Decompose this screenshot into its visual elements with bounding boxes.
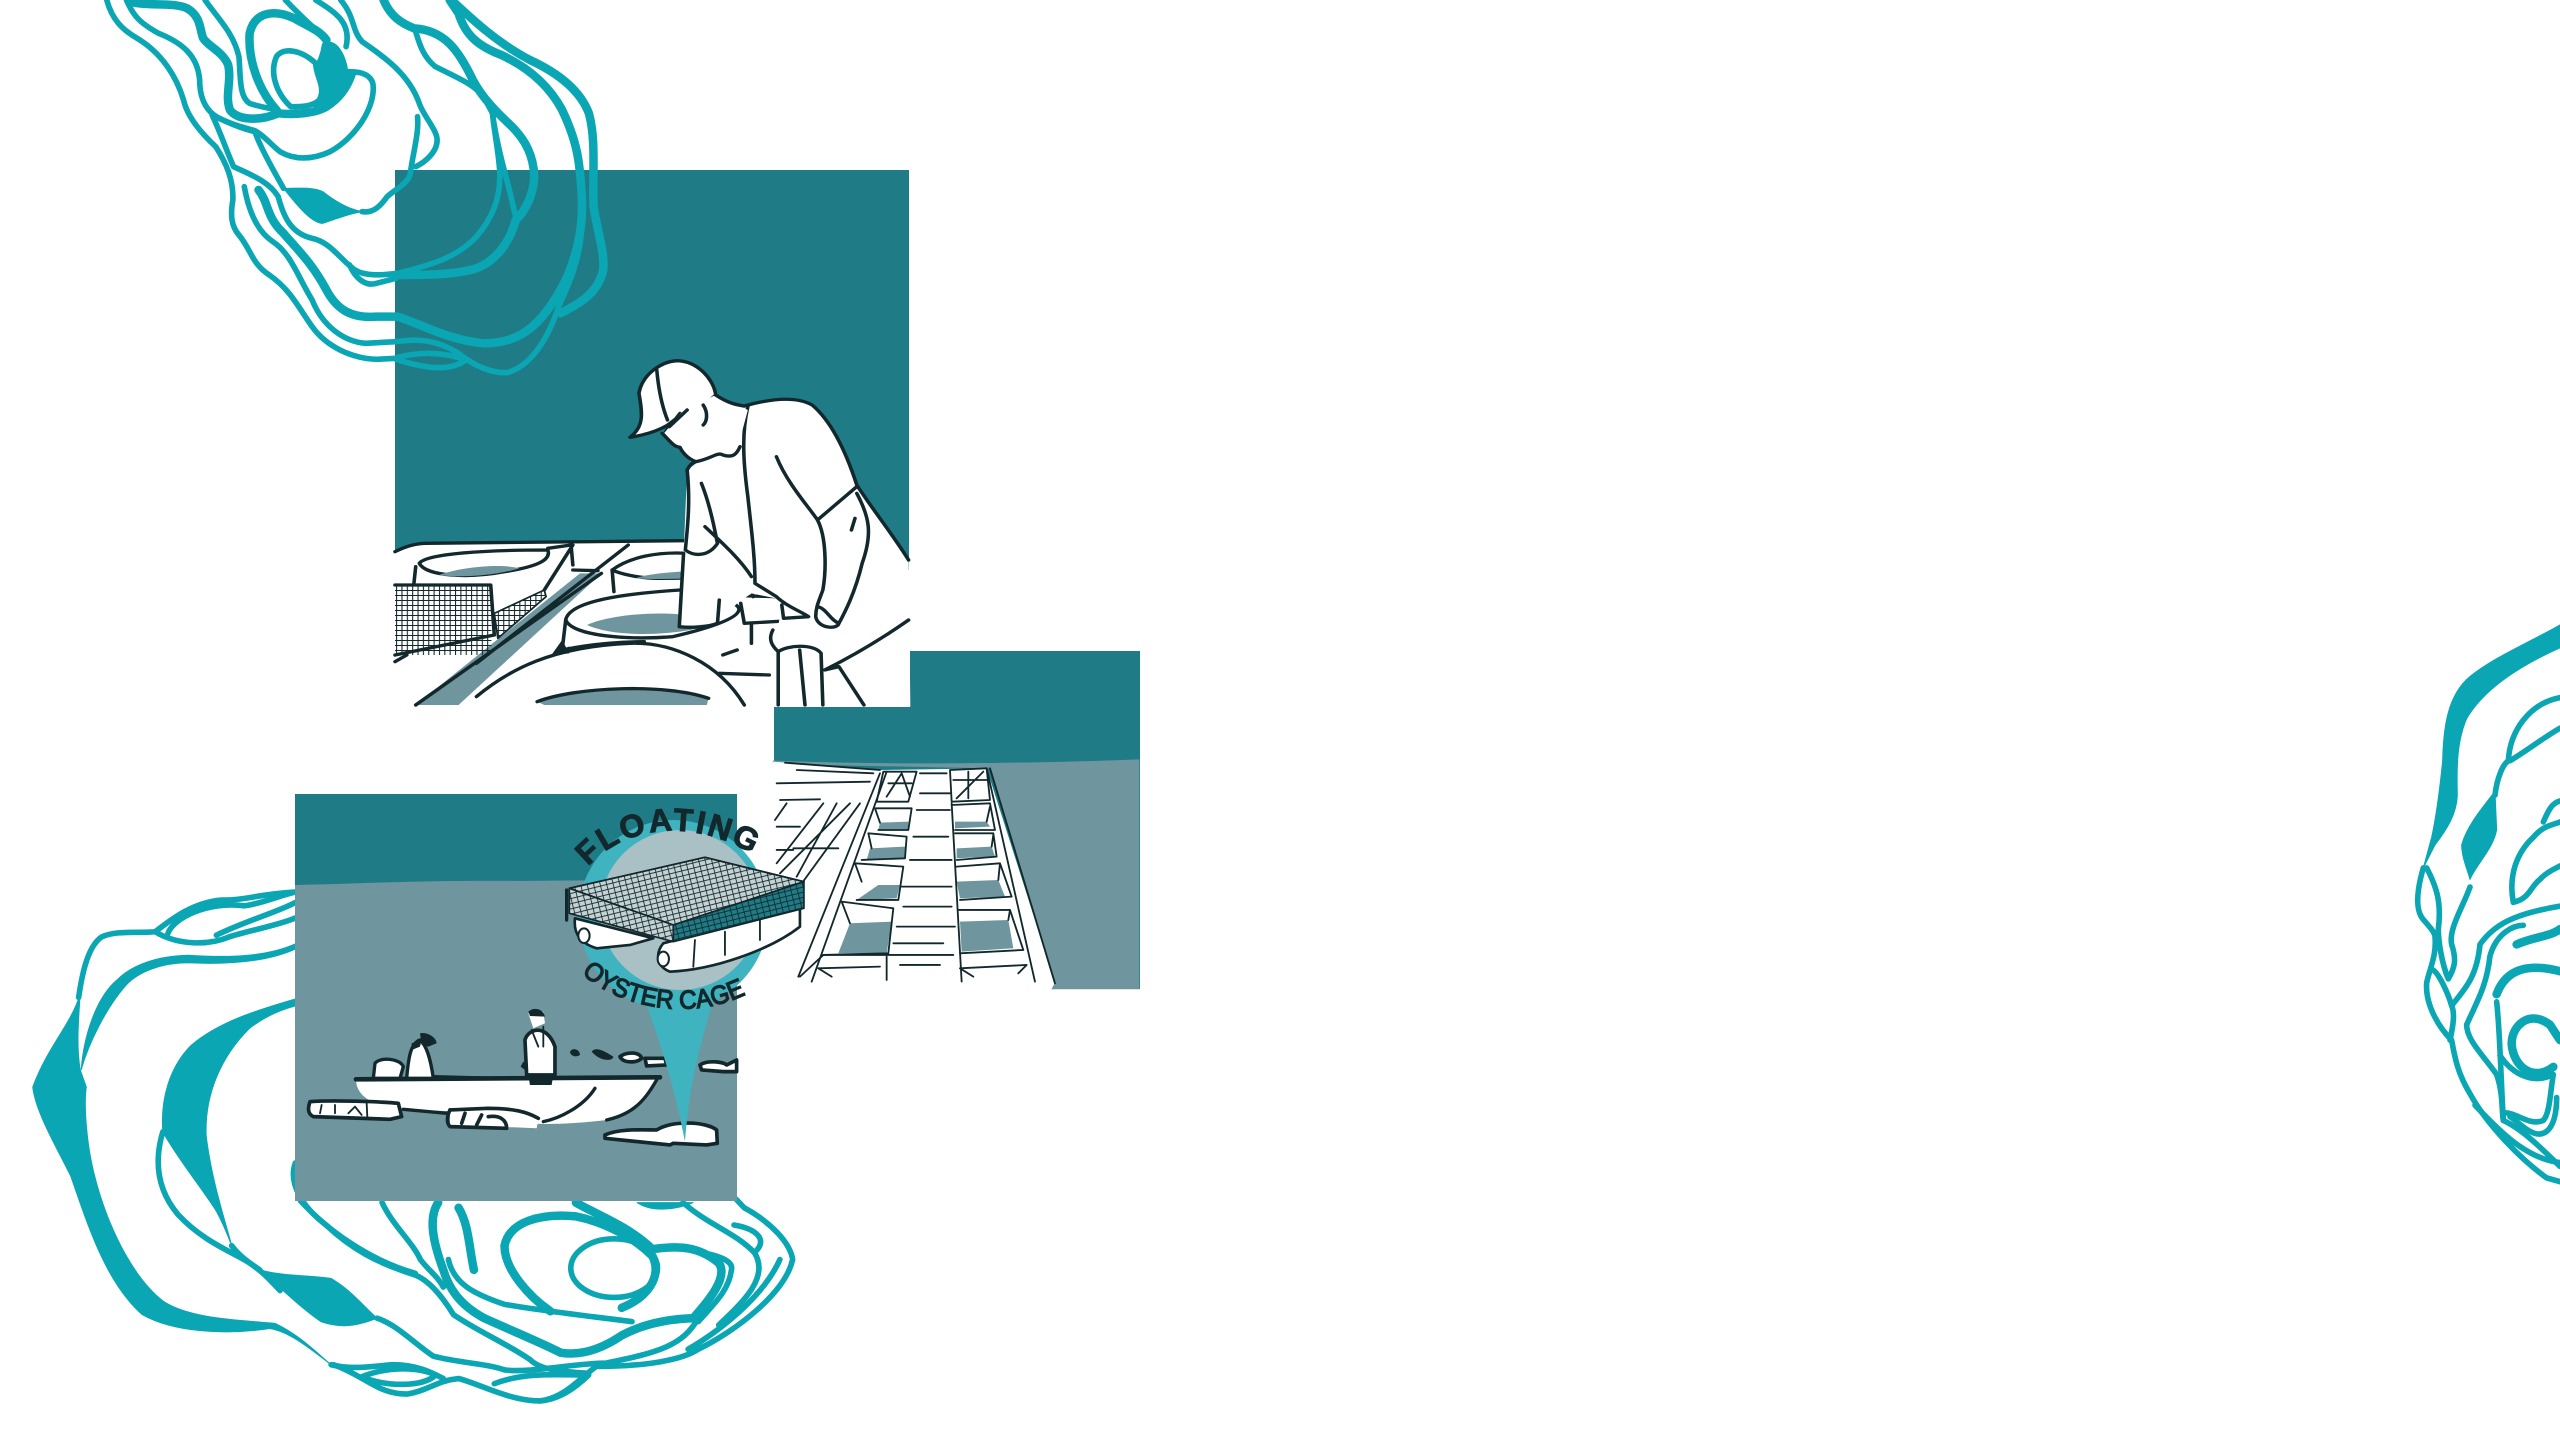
- callout text: FLOATING: [574, 808, 758, 866]
- callout text: OYSTER CAGE: [584, 962, 746, 1010]
- worker illustration: [395, 361, 910, 707]
- callout: floating oyster cage magnifier: [565, 808, 805, 1142]
- sky band: [295, 794, 737, 885]
- callout text: [574, 808, 758, 1010]
- callout pointer and disc: [578, 820, 768, 1142]
- oyster shell: right edge: [2418, 625, 2560, 1182]
- oyster shell: bottom left: [33, 892, 793, 1401]
- panel: worker sorting oysters: [395, 170, 910, 707]
- dock illustration: [773, 759, 1139, 991]
- boat scene: [309, 1009, 737, 1145]
- oyster shell: top left: [107, 0, 603, 373]
- panel: boat tending floating cages: [295, 794, 737, 1201]
- cage and pontoons: [567, 857, 804, 972]
- panel: dock aerial view: [773, 651, 1140, 991]
- floats in the water: [309, 1049, 737, 1145]
